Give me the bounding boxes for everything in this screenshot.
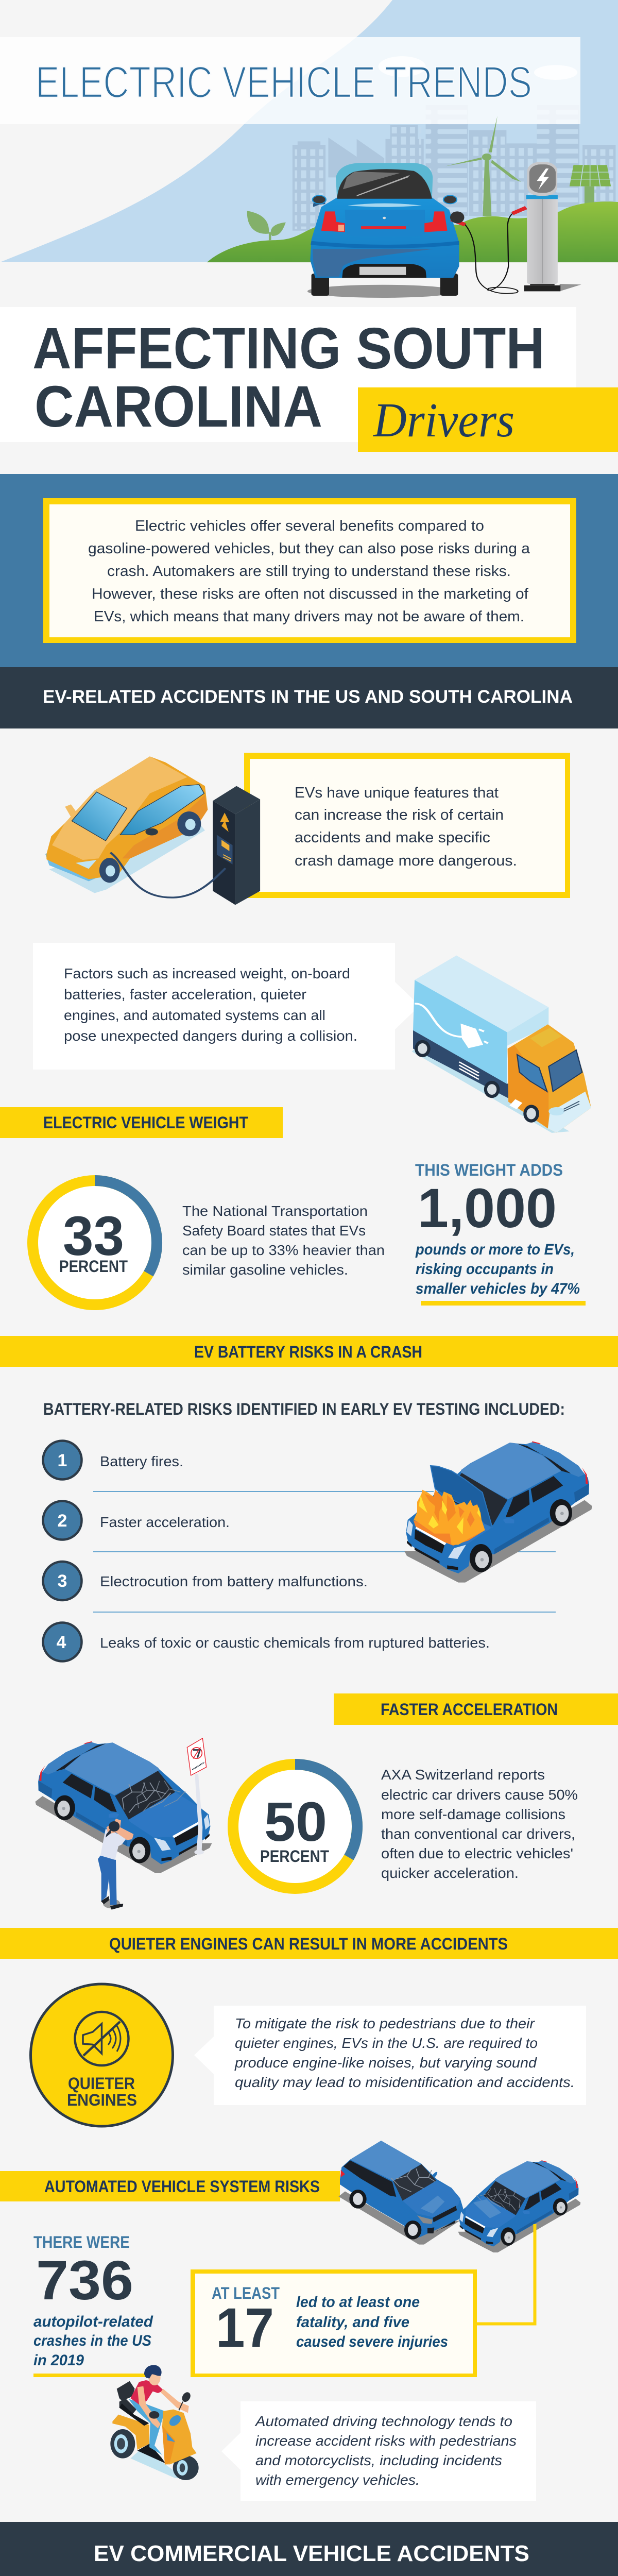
pole and sign <box>187 1738 207 1855</box>
section heading band: EV-related accidents <box>0 667 618 728</box>
section heading band: EV commercial vehicle accidents <box>0 2522 618 2576</box>
stat: 736 crashes: 736 <box>36 2249 133 2311</box>
illustration: two crashed cars <box>338 2141 580 2252</box>
intro panel <box>0 474 618 668</box>
badge: quieter engines: ENGINES <box>67 2091 137 2109</box>
callout: engine noises: quality may lead to misidentification and accidents. <box>235 2074 575 2090</box>
section heading band: EV commercial vehicle accidents: EV COMMERCIAL VEHICLE ACCIDENTS <box>94 2541 529 2566</box>
title band <box>0 37 580 124</box>
section label: quieter engines <box>0 1928 618 1959</box>
callout: engine noises: To mitigate the risk to pedestrians due to their <box>235 2015 536 2031</box>
crashed car <box>35 1741 212 1873</box>
intro text: crash. Automakers are still trying to understand these risks. <box>107 563 511 580</box>
donut chart: 50 percent: 50 <box>264 1790 327 1853</box>
stat box: at least 17: caused severe injuries <box>296 2333 448 2350</box>
callout: factors: engines, and automated systems can all <box>64 1007 325 1023</box>
text: AXA Switzerland statement: quicker acceleration. <box>381 1865 519 1881</box>
section label: automated vehicle system risks <box>0 2171 340 2201</box>
hero illustration: hills, plant, car and charging station <box>207 116 618 298</box>
callout: factors: Factors such as increased weight, on-board <box>64 965 350 981</box>
callout: factors <box>33 943 420 1070</box>
stat: 1,000 pounds: smaller vehicles by 47% <box>416 1280 580 1297</box>
stat: 736 crashes <box>33 2233 153 2377</box>
callout: unique features: accidents and make specific <box>295 829 490 846</box>
text: NTSB weight statement: similar gasoline vehicles. <box>182 1262 348 1278</box>
sub heading: battery risks: BATTERY-RELATED RISKS IDENTIFIED IN EARLY EV TESTING INCLUDED: <box>43 1400 565 1418</box>
stat: 1,000 pounds: risking occupants in <box>416 1261 554 1278</box>
section label: automated vehicle system risks: AUTOMATED VEHICLE SYSTEM RISKS <box>44 2177 320 2196</box>
callout: engine noises: quieter engines, EVs in the U.S. are required to <box>235 2035 538 2051</box>
illustration: orange EV charging <box>45 756 260 905</box>
list item 4: 4 <box>57 1633 66 1652</box>
text: AXA Switzerland statement: than conventional car drivers, <box>381 1826 575 1842</box>
list item 3: Electrocution from battery malfunctions. <box>100 1573 368 1589</box>
yellow label: drivers <box>358 387 618 452</box>
sedan <box>458 2160 580 2252</box>
intro text: However, these risks are often not discussed in the marketing of <box>92 586 529 602</box>
illustration: car with engine fire <box>404 1441 592 1583</box>
text: AXA Switzerland statement: often due to electric vehicles' <box>381 1845 573 1861</box>
connector line to callout <box>477 2224 535 2324</box>
car <box>310 163 459 296</box>
illustration: crashed car, pole and distressed driver <box>35 1738 212 1910</box>
callout: automated driving: Automated driving technology tends to <box>254 2413 512 2429</box>
stat box: at least 17 <box>191 2269 477 2377</box>
solar panel <box>570 165 611 204</box>
section label: electric vehicle weight <box>0 1107 283 1138</box>
flames <box>414 1490 485 1546</box>
stat box: at least 17: fatality, and five <box>296 2314 409 2331</box>
text: NTSB weight statement: The National Transportation <box>182 1203 368 1219</box>
callout: engine noises: produce engine-like noises, but varying sound <box>234 2055 537 2071</box>
callout: factors: pose unexpected dangers during a collision. <box>64 1028 357 1044</box>
text: NTSB weight statement: can be up to 33% heavier than <box>182 1242 385 1258</box>
plant <box>247 211 286 241</box>
list item 3: 3 <box>58 1571 67 1591</box>
woman <box>98 1819 133 1910</box>
callout: factors: batteries, faster acceleration, quieter <box>64 986 306 1003</box>
list item 1: Battery fires. <box>100 1453 183 1469</box>
callout: automated driving: and motorcyclists, including incidents <box>255 2452 502 2468</box>
callout: automated driving: with emergency vehicles. <box>255 2472 420 2488</box>
main heading: CAROLINA <box>35 374 322 439</box>
stat box: at least 17: AT LEAST <box>212 2284 280 2302</box>
text: AXA Switzerland statement: electric car drivers cause 50% <box>381 1787 578 1803</box>
callout: unique features: can increase the risk of certain <box>295 807 504 823</box>
stat: 736 crashes: in 2019 <box>33 2352 84 2369</box>
badge: quieter engines: QUIETER <box>68 2074 135 2093</box>
donut chart: 50 percent <box>233 1764 357 1889</box>
section label: quieter engines: QUIETER ENGINES CAN RESULT IN MORE ACCIDENTS <box>109 1935 508 1953</box>
icon: muted speaker <box>75 2012 129 2065</box>
callout: unique features: crash damage more dangerous. <box>295 853 517 869</box>
intro text: gasoline-powered vehicles, but they can also pose risks during a <box>88 540 530 557</box>
section label: EV battery risks: EV BATTERY RISKS IN A CRASH <box>194 1343 422 1361</box>
list item 4 <box>43 1623 490 1661</box>
hero illustration: sky, city, wind turbine, solar panel <box>0 0 618 262</box>
list item 1 <box>43 1440 183 1480</box>
callout: unique features: EVs have unique features that <box>295 785 499 801</box>
intro text <box>88 518 530 625</box>
list item 2: 2 <box>58 1511 67 1531</box>
section heading band: EV-related accidents: EV-RELATED ACCIDENTS IN THE US AND SOUTH CAROLINA <box>43 687 573 707</box>
SUV <box>338 2141 463 2245</box>
stat: 1,000 pounds: pounds or more to EVs, <box>415 1241 575 1258</box>
list item 4: Leaks of toxic or caustic chemicals from ruptured batteries. <box>100 1635 490 1651</box>
illustration: scooter rider <box>110 2365 199 2480</box>
open hood <box>431 1466 492 1528</box>
list item 3 <box>43 1562 368 1600</box>
callout: unique features <box>244 753 570 898</box>
callout: engine noises <box>194 2006 586 2105</box>
callout: automated driving: increase accident risks with pedestrians <box>255 2433 517 2449</box>
list item 1: 1 <box>58 1451 67 1470</box>
callout: automated driving <box>221 2401 536 2501</box>
list item 2: Faster acceleration. <box>100 1514 230 1530</box>
section label: faster acceleration: FASTER ACCELERATION <box>381 1700 558 1719</box>
main heading: AFFECTING SOUTH <box>32 316 545 381</box>
stat box: at least 17: 17 <box>216 2296 274 2359</box>
hills <box>207 201 618 262</box>
white band behind main heading <box>0 307 576 442</box>
stat: 736 crashes: THERE WERE <box>33 2233 130 2251</box>
intro text: Electric vehicles offer several benefits compared to <box>135 518 484 534</box>
charging station <box>524 162 560 291</box>
stat box: at least 17: led to at least one <box>296 2294 420 2311</box>
text: AXA Switzerland statement: more self-damage collisions <box>381 1806 565 1822</box>
donut chart: 33 percent <box>33 1181 157 1304</box>
charging cable <box>450 208 526 294</box>
donut chart: 33 percent: PERCENT <box>59 1257 128 1276</box>
intro text: EVs, which means that many drivers may not be aware of them. <box>94 608 524 625</box>
text: NTSB weight statement: Safety Board states that EVs <box>182 1223 366 1239</box>
wind turbine <box>445 116 521 216</box>
stat: 736 crashes: autopilot-related <box>33 2313 153 2330</box>
donut chart: 33 percent: 33 <box>63 1205 124 1267</box>
section label: faster acceleration <box>334 1693 618 1725</box>
yellow label: drivers: Drivers <box>372 394 514 447</box>
illustration: electric delivery truck <box>412 956 591 1133</box>
section label: electric vehicle weight: ELECTRIC VEHICLE WEIGHT <box>43 1113 248 1132</box>
stat: 1,000 pounds <box>415 1161 586 1306</box>
stat: 1,000 pounds: 1,000 <box>418 1177 557 1239</box>
text: AXA Switzerland statement <box>381 1767 578 1881</box>
text: NTSB weight statement <box>182 1203 385 1278</box>
badge: quieter engines <box>31 1984 173 2126</box>
section label: EV battery risks <box>0 1336 618 1367</box>
numbered list: battery risks <box>43 1440 556 1661</box>
main heading <box>32 316 545 439</box>
list item 2 <box>43 1501 230 1539</box>
donut chart: 50 percent: PERCENT <box>260 1847 329 1866</box>
text: AXA Switzerland statement: AXA Switzerland reports <box>381 1767 545 1783</box>
stat: 1,000 pounds: THIS WEIGHT ADDS <box>415 1161 563 1179</box>
car shadow and charging cable <box>307 285 457 298</box>
stat: 736 crashes: crashes in the US <box>33 2332 151 2349</box>
